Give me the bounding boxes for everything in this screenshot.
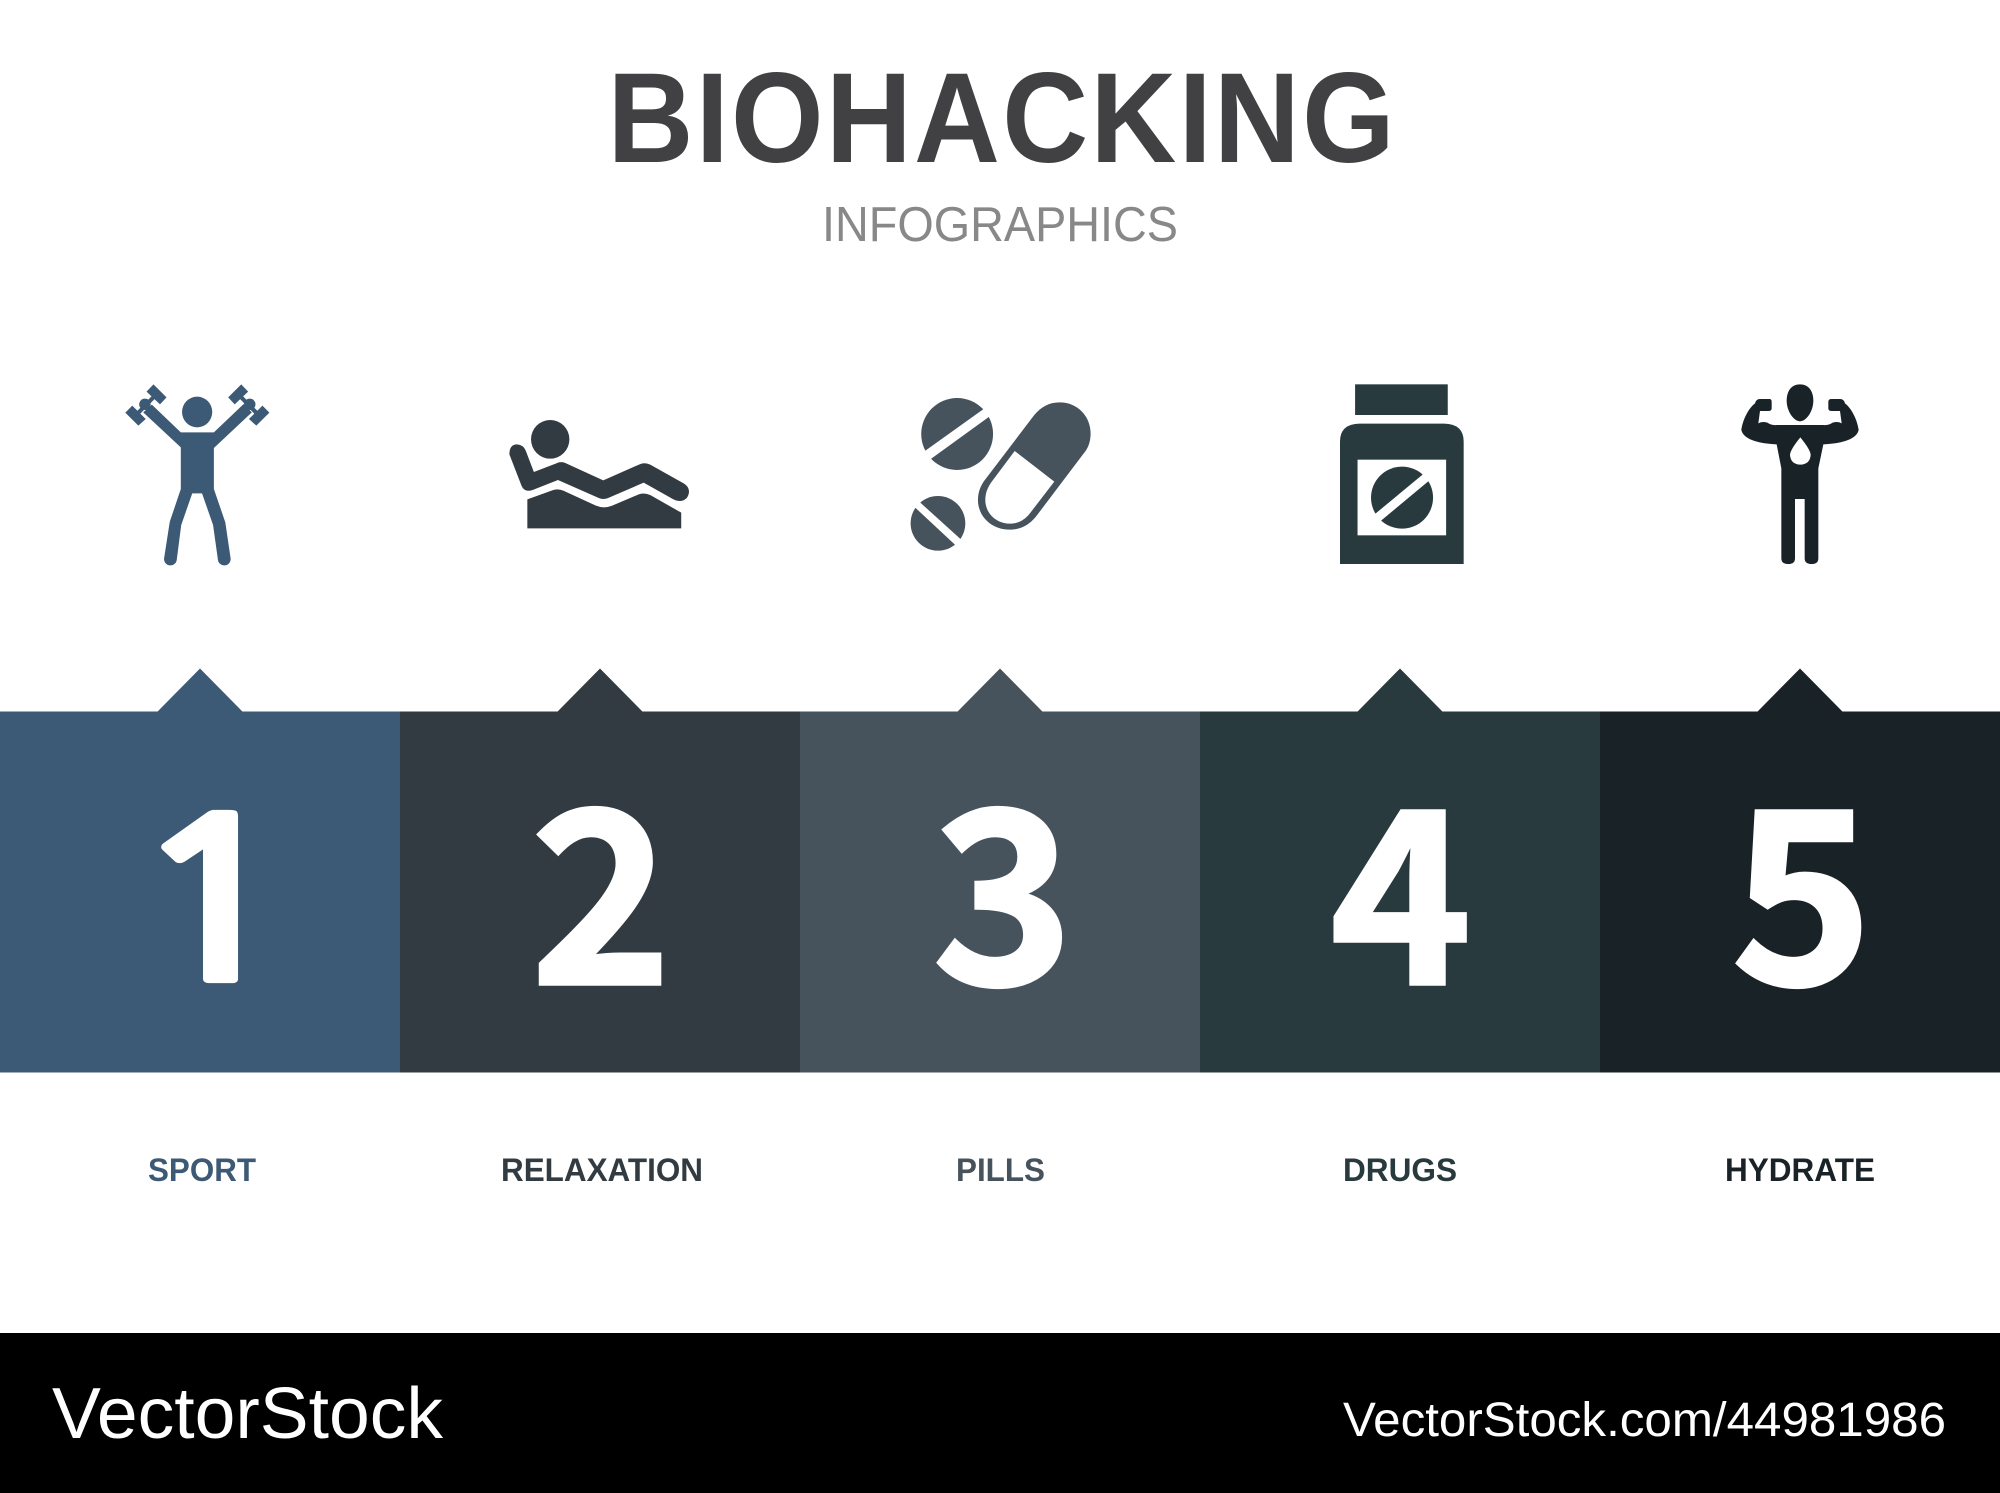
label: hydrate: HYDRATE [1725,1152,1875,1188]
panel: step 5 band [1600,668,2000,1072]
panel: step 1 band [0,668,400,1072]
label: pills: PILLS [956,1152,1045,1188]
panel: step 3 band [800,668,1200,1072]
footer bar [0,1333,2000,1493]
footer logo text: VectorStock [52,1374,444,1454]
icon: drugs, medicine bottle [1340,384,1464,564]
number 4: 4 [1330,707,1472,1054]
label: relaxation: RELAXATION [501,1152,703,1188]
label: drugs: DRUGS [1343,1152,1457,1188]
number 3: 3 [932,707,1074,1054]
number 2: 2 [530,707,672,1054]
subtitle: INFOGRAPHICS [822,198,1178,252]
icon: relaxation, person lying on mattress [509,420,689,528]
footer url: VectorStock.com/44981986 [1343,1394,1946,1447]
icon: sport, person lifting dumbbells [125,384,269,565]
number 1: 1 [126,793,302,1015]
icon: pills [911,398,1091,551]
title: BIOHACKING [608,47,1397,190]
panel: step 2 band [400,668,800,1072]
number 5: 5 [1731,707,1873,1054]
panel: step 4 band [1200,668,1600,1072]
icon: hydrate, muscular person with water drop [1741,384,1859,564]
label: sport: SPORT [148,1152,256,1188]
